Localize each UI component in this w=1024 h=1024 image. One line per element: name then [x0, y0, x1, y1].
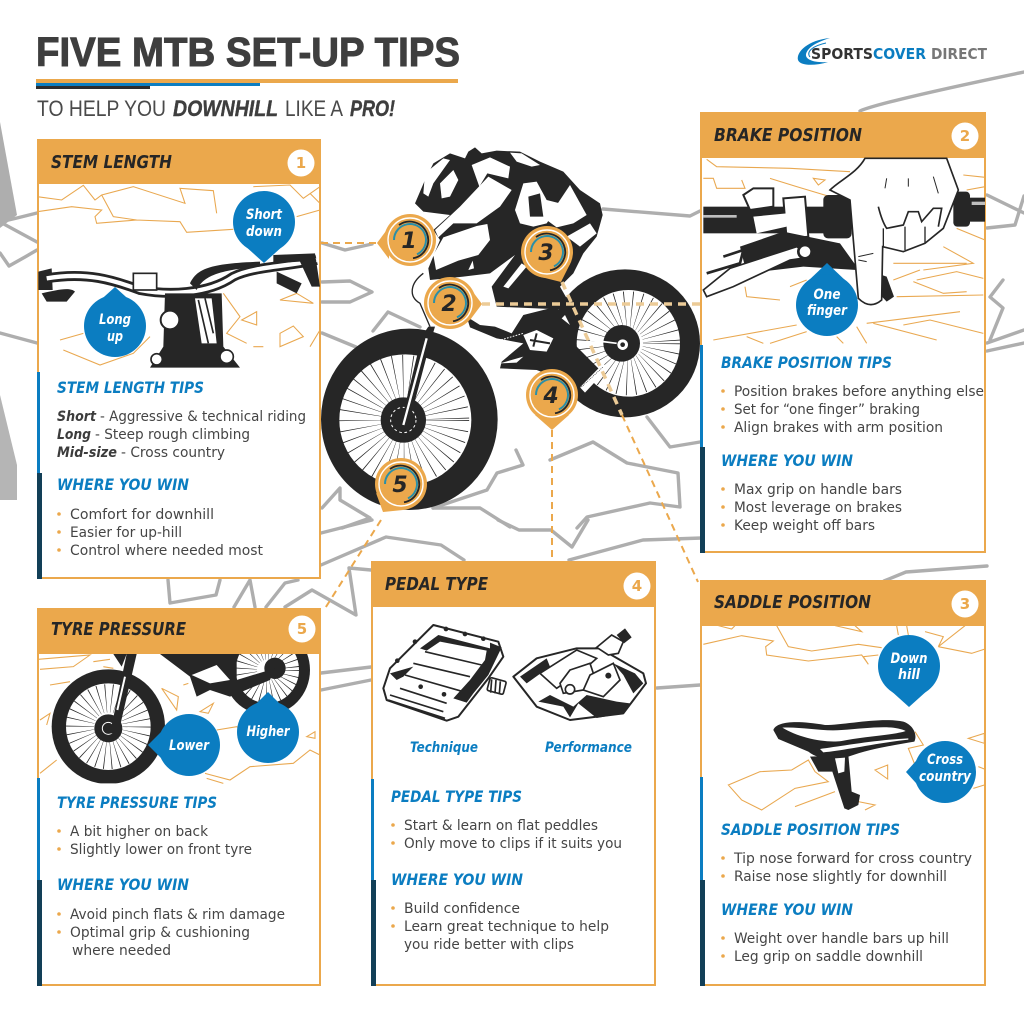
- where you win: saddle: Leg grip on saddle downhill: [734, 949, 923, 965]
- dashed connectors: [321, 243, 700, 610]
- brake position tips: [721, 353, 984, 436]
- marker 5 on bike: [375, 458, 427, 512]
- illustration: bike wheels: [39, 654, 319, 784]
- brake position tips: BRAKE POSITION TIPS: [721, 353, 892, 372]
- topographic lines: brake panel: [703, 159, 985, 343]
- where you win: tyre: where needed: [72, 943, 171, 959]
- where you win: stem: Easier for up-hill: [70, 525, 182, 541]
- subtitle: TO HELP YOU: [37, 96, 166, 121]
- logo: Sportscover Direct: [798, 38, 988, 65]
- where you win: saddle: WHERE YOU WIN: [721, 900, 854, 919]
- stem length tips: Mid-size: [57, 445, 117, 461]
- brake position tips: Set for “one finger” braking: [734, 402, 920, 418]
- tyre pressure tips: TYRE PRESSURE TIPS: [57, 793, 217, 812]
- stem length tips: Short: [57, 409, 97, 425]
- topographic lines: saddle panel: [703, 626, 985, 810]
- callout: lower: [148, 714, 220, 776]
- panel header: saddle position: [700, 580, 986, 626]
- panel header: saddle position: 3: [960, 595, 970, 613]
- panel: stem length: [37, 139, 321, 579]
- where you win: stem: Comfort for downhill: [70, 507, 214, 523]
- saddle position tips: SADDLE POSITION TIPS: [721, 820, 900, 839]
- tyre pressure tips: [57, 793, 252, 858]
- callout: long up: up: [107, 329, 123, 345]
- callout: one finger: [796, 263, 858, 336]
- stem length tips: STEM LENGTH TIPS: [57, 378, 204, 397]
- callout: cross country: [906, 741, 976, 803]
- panel header: stem length: STEM LENGTH: [51, 153, 172, 173]
- subtitle: LIKE A: [285, 96, 343, 121]
- panel header: brake position: 2: [960, 127, 970, 145]
- panel: saddle position: [700, 580, 986, 986]
- panel header: pedal type: PEDAL TYPE: [385, 575, 488, 595]
- callout: long up: [84, 287, 146, 357]
- panel: tyre pressure: [37, 608, 321, 986]
- where you win: stem: WHERE YOU WIN: [57, 475, 190, 494]
- where you win: brake: WHERE YOU WIN: [721, 451, 854, 470]
- panel header: stem length: 1: [296, 154, 306, 172]
- accent bar: [371, 779, 376, 986]
- panel: brake position: [700, 112, 986, 553]
- marker 4 on bike: 4: [542, 384, 559, 409]
- marker 3 on bike: [521, 226, 573, 282]
- label: performance: Performance: [545, 740, 632, 756]
- where you win: tyre: Avoid pinch flats & rim damage: [70, 907, 285, 923]
- where you win: brake: Keep weight off bars: [734, 518, 875, 534]
- callout: lower: Lower: [169, 738, 210, 754]
- front wheel: [321, 329, 498, 510]
- accent bar: [700, 345, 705, 553]
- label: technique: Technique: [410, 740, 478, 756]
- callout: one finger: finger: [807, 303, 848, 319]
- marker 2 on bike: [424, 277, 482, 329]
- logo: Sportscover Direct: COVER: [873, 45, 926, 63]
- where you win: pedal: Build confidence: [404, 901, 520, 917]
- accent bar: [700, 777, 705, 986]
- where you win: brake: [721, 451, 902, 534]
- brake position tips: Align brakes with arm position: [734, 420, 943, 436]
- callout: cross country: Cross: [927, 752, 963, 768]
- where you win: tyre: [57, 875, 285, 959]
- marker 3 on bike: 3: [538, 241, 554, 266]
- callout: long up: Long: [99, 312, 131, 328]
- callout: short down: Short: [246, 207, 283, 223]
- stem length tips: Long: [57, 427, 91, 443]
- logo: Sportscover Direct: SPORTS: [811, 45, 873, 63]
- where you win: pedal: Learn great technique to help: [404, 919, 609, 935]
- brake position tips: Position brakes before anything else: [734, 384, 984, 400]
- callout: down hill: hill: [898, 667, 920, 683]
- saddle position tips: Tip nose forward for cross country: [733, 851, 972, 867]
- callout: short down: [233, 191, 295, 263]
- illustration: saddle: [703, 626, 985, 810]
- pedal type tips: Only move to clips if it suits you: [404, 836, 622, 852]
- panel header: brake position: [700, 112, 986, 158]
- panel header: stem length: [37, 139, 321, 184]
- where you win: pedal: you ride better with clips: [404, 937, 574, 953]
- illustration: clip pedal: [513, 628, 646, 720]
- frame and drivetrain: [467, 307, 607, 393]
- where you win: saddle: [721, 900, 949, 965]
- callout: higher: [237, 692, 299, 763]
- tyre pressure tips: Slightly lower on front tyre: [70, 842, 252, 858]
- panel header: brake position: BRAKE POSITION: [714, 126, 862, 146]
- marker 4 on bike: [526, 369, 578, 430]
- where you win: stem: Control where needed most: [70, 543, 263, 559]
- illustration: brake lever and hand: [703, 158, 985, 343]
- panel header: saddle position: SADDLE POSITION: [714, 593, 871, 613]
- where you win: brake: Most leverage on brakes: [734, 500, 902, 516]
- callout: short down: down: [246, 224, 282, 240]
- where you win: tyre: Optimal grip & cushioning: [70, 925, 250, 941]
- where you win: saddle: Weight over handle bars up hill: [734, 931, 949, 947]
- illustration: flat pedal: [383, 625, 506, 721]
- callout: higher: Higher: [246, 724, 290, 740]
- where you win: pedal: [391, 870, 609, 953]
- panel header: pedal type: 4: [632, 577, 642, 595]
- pedal type tips: PEDAL TYPE TIPS: [391, 787, 522, 806]
- panel header: pedal type: [371, 561, 656, 607]
- where you win: tyre: WHERE YOU WIN: [57, 875, 190, 894]
- rear wheel: [550, 269, 700, 417]
- pedal type tips: Start & learn on flat peddles: [404, 818, 598, 834]
- accent bar: [37, 372, 42, 579]
- fork and head tube: [400, 273, 435, 430]
- where you win: brake: Max grip on handle bars: [734, 482, 902, 498]
- tyre pressure tips: A bit higher on back: [70, 824, 209, 840]
- where you win: stem: [57, 475, 263, 559]
- pedal type tips: [391, 787, 622, 852]
- panel: pedal type: [371, 561, 656, 986]
- stem length tips: - Aggressive & technical riding: [100, 409, 306, 425]
- panel header: tyre pressure: [37, 608, 321, 654]
- panel header: tyre pressure: TYRE PRESSURE: [51, 620, 186, 640]
- stem length tips: - Steep rough climbing: [95, 427, 250, 443]
- title: FIVE MTB SET-UP TIPS: [36, 29, 460, 75]
- marker 2 on bike: 2: [441, 292, 457, 317]
- title underline: [36, 79, 458, 89]
- marker 5 on bike: 5: [392, 473, 408, 498]
- logo: Sportscover Direct: DIRECT: [931, 45, 988, 63]
- stem length tips: [57, 378, 306, 461]
- accent bar: [37, 778, 42, 986]
- subtitle: [37, 96, 395, 121]
- callout: down hill: Down: [890, 651, 928, 667]
- saddle position tips: [721, 820, 972, 885]
- illustration: handlebar and stem: [38, 253, 320, 368]
- saddle position tips: Raise nose slightly for downhill: [734, 869, 947, 885]
- panel header: tyre pressure: 5: [297, 620, 307, 638]
- subtitle: PRO!: [350, 96, 395, 121]
- illustration: downhill rider on mountain bike: [321, 147, 700, 510]
- rider silhouette: [415, 147, 603, 310]
- callout: down hill: [878, 635, 940, 707]
- subtitle: DOWNHILL: [173, 96, 278, 121]
- background: grey mountain lines: [0, 72, 1024, 690]
- stem length tips: - Cross country: [121, 445, 225, 461]
- marker 1 on bike: [377, 214, 436, 266]
- callout: one finger: One: [814, 287, 840, 303]
- topographic lines: stem panel: [37, 185, 320, 365]
- callout: cross country: country: [919, 769, 972, 785]
- where you win: pedal: WHERE YOU WIN: [391, 870, 524, 889]
- marker 1 on bike: 1: [401, 229, 417, 254]
